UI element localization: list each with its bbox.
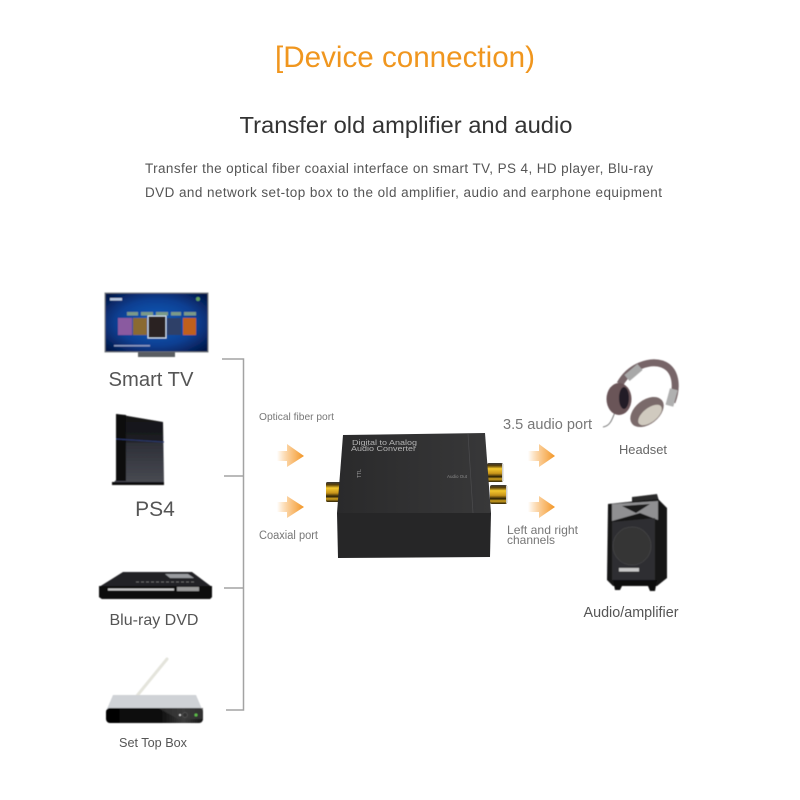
device: converter xyxy=(326,433,508,558)
right connectors xyxy=(487,463,508,504)
description text: DVD and network set-top box to the old amplifier, audio and earphone equipment xyxy=(145,185,662,200)
converter label: Audio Converter xyxy=(351,446,417,453)
icon: Blu-ray DVD player xyxy=(99,572,212,599)
left connector xyxy=(326,482,341,502)
label: left and right channels xyxy=(507,523,579,547)
icon: speaker xyxy=(607,494,667,591)
label: 3.5 audio port: 3.5 audio port xyxy=(503,417,592,433)
label: Audio/amplifier: Audio/amplifier xyxy=(584,605,679,621)
converter front xyxy=(337,513,491,558)
arrow: audio out top xyxy=(528,444,555,467)
converter label xyxy=(351,440,468,479)
label: left and right channels: Left and right xyxy=(507,523,579,537)
icon: headset xyxy=(603,363,678,433)
arrow: optical in xyxy=(277,444,304,467)
converter label: Audio Out xyxy=(447,474,468,479)
description text xyxy=(145,161,662,200)
label: Headset: Headset xyxy=(619,443,668,457)
icon: smart TV xyxy=(105,293,208,357)
icon: PS4 console xyxy=(112,414,164,485)
icon: set top box xyxy=(106,659,203,723)
arrow: coaxial in xyxy=(277,496,304,518)
converter label: TTL xyxy=(357,469,363,478)
label: PS4: PS4 xyxy=(135,498,175,521)
title: [Device connection) xyxy=(275,41,535,74)
label: left and right channels: channels xyxy=(507,533,555,547)
label: Coaxial port: Coaxial port xyxy=(259,530,319,542)
subtitle: Transfer old amplifier and audio xyxy=(240,112,572,138)
bracket xyxy=(222,359,244,710)
description text: Transfer the optical fiber coaxial interface on smart TV, PS 4, HD player, Blu-ray xyxy=(145,161,653,176)
label: Smart TV: Smart TV xyxy=(108,369,194,391)
arrow: audio out bottom xyxy=(528,496,555,518)
converter label: Digital to Analog xyxy=(352,440,417,447)
label: Blu-ray DVD: Blu-ray DVD xyxy=(110,612,198,629)
label: Set Top Box: Set Top Box xyxy=(119,736,188,750)
converter top xyxy=(337,433,491,513)
label: Optical fiber port: Optical fiber port xyxy=(259,411,334,423)
